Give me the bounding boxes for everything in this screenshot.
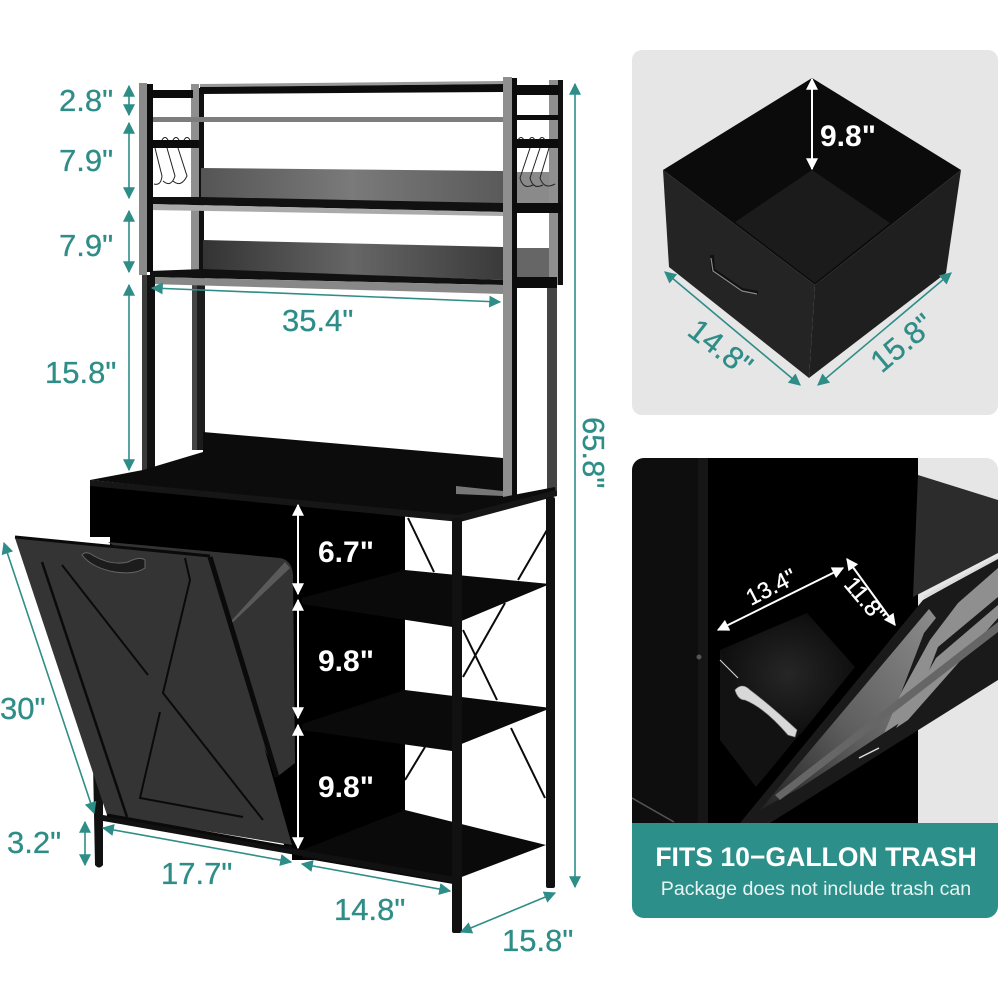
furniture: tilt-out door and bin <box>15 537 295 848</box>
dimension: 6.7 inch shelf <box>298 505 374 594</box>
dimension: 15.8 inch: 15.8" <box>45 355 116 390</box>
dimension: 15.8 inch depth <box>461 893 573 958</box>
shelf 3 <box>302 810 546 885</box>
shelf 2 <box>150 240 503 294</box>
dimension: box length <box>818 273 951 385</box>
front right post <box>452 518 462 933</box>
hooks right <box>518 138 555 186</box>
photo background <box>918 458 998 823</box>
dimension: box length: 15.8" <box>864 307 941 379</box>
compartment back wall <box>708 458 918 823</box>
dimension: 2.8 inch: 2.8" <box>59 83 113 118</box>
countertop highlight <box>456 486 503 496</box>
center panel <box>292 505 405 860</box>
grey upper bar <box>147 117 503 122</box>
dimension: box width <box>665 272 800 385</box>
left cabinet side <box>632 458 698 823</box>
cabinet side and opening <box>90 480 298 850</box>
door grey panel <box>760 609 936 810</box>
teal caption banner <box>632 823 998 918</box>
dimension: 14.8 inch <box>302 864 450 927</box>
bin fold <box>231 562 290 624</box>
dimension: 15.8 inch depth: 15.8" <box>502 923 573 958</box>
dimension: 9.8 inch lower shelf <box>298 725 374 848</box>
handle <box>720 660 797 737</box>
dimension: 7.9 inch upper <box>59 123 129 198</box>
caption note: Package does not include trash can <box>661 878 971 900</box>
box right face <box>809 170 961 378</box>
dimension: 3.2 inch: 3.2" <box>7 825 61 860</box>
back posts <box>191 80 563 490</box>
shelf 1 <box>302 570 550 628</box>
compartment floor lower <box>720 651 799 786</box>
dimension: 7.9 inch lower: 7.9" <box>59 228 113 263</box>
box left face <box>663 170 815 378</box>
cabinet corner highlight <box>632 798 674 822</box>
dimension: box depth <box>812 79 876 169</box>
right shelf <box>913 475 998 597</box>
caption heading: FITS 10−GALLON TRASH <box>655 842 977 872</box>
dimension: box width: 14.8" <box>682 312 759 383</box>
door base <box>740 558 998 823</box>
back right post <box>546 497 555 888</box>
dimension: 17.7 inch: 17.7" <box>161 856 232 891</box>
door edges <box>15 537 292 848</box>
dimension: 3.2 inch <box>7 822 85 865</box>
dimension: 7.9 inch upper: 7.9" <box>59 143 113 178</box>
door handle <box>82 553 145 573</box>
dimension: 35.4 inch <box>152 288 500 338</box>
cross braces <box>405 518 547 798</box>
panel: trash compartment photo <box>632 458 998 918</box>
screw <box>696 654 702 660</box>
dimension: 7.9 inch lower <box>59 211 129 272</box>
dimension: 65.8 inch overall height: 65.8" <box>576 417 611 488</box>
bottom rail <box>103 815 455 883</box>
top rail <box>200 81 503 87</box>
door light bands <box>884 568 998 733</box>
box floor <box>735 170 890 283</box>
door edge highlight <box>923 556 998 599</box>
post edge <box>706 458 708 823</box>
furniture: cabinet body <box>90 432 557 933</box>
shelf 1 <box>148 168 503 216</box>
bin liner <box>108 542 295 777</box>
dimension: 13.4 inch: 13.4" <box>741 563 800 610</box>
countertop front rail <box>90 480 557 522</box>
dimension: 17.7 inch <box>103 828 291 891</box>
dimension: 35.4 inch: 35.4" <box>282 303 353 338</box>
shelf 2 <box>302 690 551 752</box>
compartment floor <box>720 613 855 735</box>
dimension: 13.4 inch <box>718 563 843 630</box>
panel: storage box <box>632 50 998 415</box>
furniture: hutch upper shelving <box>139 77 563 498</box>
dimension: 30 inch door <box>0 543 94 813</box>
left leg <box>93 763 103 868</box>
dimension: 9.8 inch shelf <box>298 600 374 718</box>
door mark <box>859 748 879 758</box>
dimension: 11.8 inch: 11.8" <box>839 572 892 627</box>
dimension: 14.8 inch: 14.8" <box>334 892 405 927</box>
panel background <box>632 50 998 415</box>
countertop and backsplash <box>90 432 556 517</box>
dimension: 30 inch door: 30" <box>0 691 46 726</box>
box handle <box>711 255 758 294</box>
dimension: 6.7 inch shelf: 6.7" <box>318 536 374 569</box>
front posts <box>139 77 517 498</box>
dimension: 9.8 inch lower shelf: 9.8" <box>318 771 374 804</box>
box interior <box>663 78 961 285</box>
door panel <box>15 538 292 845</box>
dimension: 9.8 inch shelf: 9.8" <box>318 645 374 678</box>
dimension: box depth: 9.8" <box>820 120 876 153</box>
door lower strip <box>775 622 998 800</box>
side rails and hook bars <box>153 85 561 288</box>
hooks left <box>154 138 190 184</box>
